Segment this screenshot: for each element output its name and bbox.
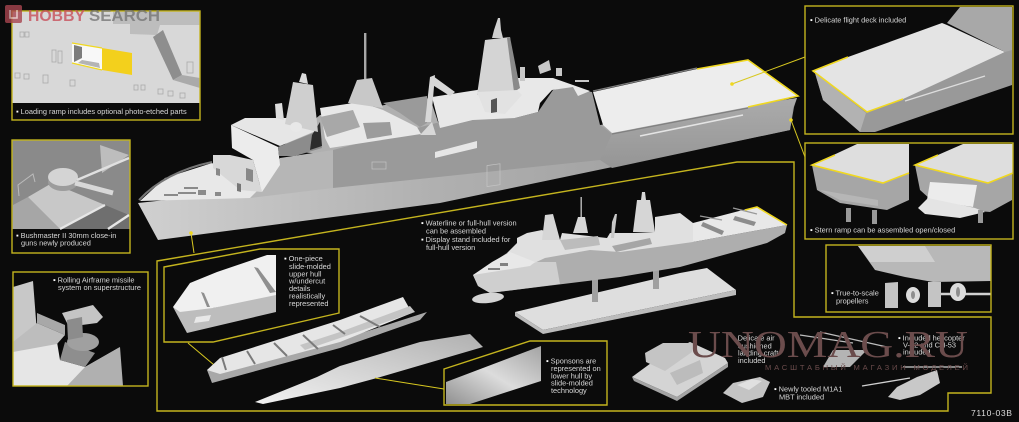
bridge face [231,125,280,192]
watermark: HOBBY SEARCH: SEARCH [89,8,160,25]
flight deck with aircraft [693,207,787,242]
stand pegs [592,266,659,302]
text: helicopters: V-22 and CH-53 [903,340,956,350]
watermark: HOBBY SEARCH: HOBBY [28,8,86,25]
well deck wall [422,120,473,157]
text: helicopters [898,334,965,356]
closed ramp view [812,144,909,224]
hull description: upper hull [289,270,322,278]
sponsons description: ▪ Sponsons are [546,356,596,366]
panel: Rolling Airframe missile [13,272,148,386]
crane [420,75,455,135]
panel: Bushmaster gun: guns newly produced [21,238,91,248]
text: air cushioned landing craft: included [738,356,766,365]
upper hull part [207,297,427,383]
panel caption: ▪ True-to-scale [831,288,879,298]
CH-53 helicopter [862,367,962,400]
panel caption: ▪ Bushmaster II 30mm close-in [16,231,116,240]
sponsons description [546,356,601,395]
sponsons description: technology [551,386,587,395]
large frame: hull and accessories [157,162,991,411]
bow deck [473,252,535,275]
panel caption: ▪ Stern ramp can be assembled open/closed [810,226,955,234]
watermark: HOBBY SEARCH [5,5,160,25]
callout line: flight deck [730,57,805,86]
product code: 7110-03B [971,408,1012,418]
display stand [515,268,736,330]
midship mast and antenna [364,33,366,79]
bow deck [140,163,258,201]
open ramp view [915,144,1013,223]
panel caption: ▪ Rolling Airframe missile [53,276,134,284]
text: air cushioned landing craft: ▪ Delicate air [733,334,775,342]
text: M1A1 tank: ▪ Newly tooled M1A1 [774,384,842,394]
main hull [138,98,797,240]
upper hull side [333,85,700,188]
callout line: sponsons [375,378,444,389]
panel caption: ▪ Delicate flight deck included [810,16,906,24]
midship walls [320,110,360,137]
main ship model [138,18,798,240]
hull description: details [289,284,311,293]
landing craft model [632,342,728,401]
hull description: represented [289,299,328,308]
text: M1A1 tank: MBT included [779,392,824,402]
sponsons description: slide-molded [551,378,593,388]
text: air cushioned landing craft: cushioned [738,342,772,350]
watermark: UNOMAG.RU: МАСШТАБНЫЙ МАГАЗИН МОДЕЛЕЙ [765,363,968,372]
rudders and propellers [885,282,991,308]
text: helicopters: ▪ Included helicopter [898,334,965,342]
hull [473,225,787,293]
gun barrel [77,158,129,180]
masts [542,192,655,240]
V-22 helicopter [800,332,887,367]
panel caption: ▪ Loading ramp includes optional photo-etched parts [16,107,187,116]
stern hull side [600,98,797,168]
hull description [284,254,331,308]
gun turret [48,173,78,191]
aft fittings [520,60,589,82]
yellow etched ramp [102,48,132,75]
hull description: w/undercut [288,276,325,286]
text: hull versions: ▪ Waterline or full-hull version [421,218,517,228]
hull description: slide-molded [289,262,331,271]
flight deck [593,60,798,133]
deck fittings [164,187,221,196]
text: helicopters: included [903,348,931,356]
text: M1A1 tank [774,384,842,402]
midship deck [320,102,421,148]
bow bulwark [139,162,212,200]
sponsons description: lower hull by [551,372,592,380]
forward hull side [250,150,333,198]
callout line: upper hull [188,343,220,370]
callout line: bow [189,231,194,253]
aft mast [477,37,517,95]
deck surface [813,23,1005,112]
forward superstructure block [213,155,262,192]
panel: sponsons inset [444,341,607,405]
text: air cushioned landing craft: landing craft [738,348,778,358]
full-hull ship on stand [472,192,787,334]
panel: upper hull inset [164,249,339,342]
hull description: realistically [289,292,325,300]
panel: propellers [826,245,991,312]
bridge deck [231,118,318,146]
panel: stern ramp [805,143,1013,239]
text: air cushioned landing craft [733,334,778,365]
watermark: UNOMAG.RU: UNOMAG.RU [688,324,968,366]
hull hatches [372,162,500,187]
flight deck highlight [697,60,798,107]
sponsons description: represented on [551,364,601,373]
panel: flight deck [805,6,1013,134]
text: hull versions [421,218,517,252]
panel: propellers: propellers [836,296,869,306]
superstructure [507,213,693,265]
callout line: stern ramp [789,118,805,157]
missile launcher [67,333,99,351]
panel: Bushmaster gun [12,140,130,253]
bridge front wall [278,131,322,156]
text: hull versions: can be assembled [426,226,486,236]
hull description: ▪ One-piece [284,254,323,263]
aft deck [432,78,590,128]
forward mast [285,82,318,132]
keel bulb [472,291,504,305]
panel: loading ramp [12,11,200,120]
bow hull render [173,292,276,333]
text: hull versions: full-hull version [426,243,475,252]
panel: Rolling Airframe missile: system on superstructure [58,283,141,292]
lower hull part [255,334,483,404]
M1A1 tank model [723,377,770,403]
text: hull versions: ▪ Display stand included for [421,235,511,244]
superstructure backing [278,98,440,155]
